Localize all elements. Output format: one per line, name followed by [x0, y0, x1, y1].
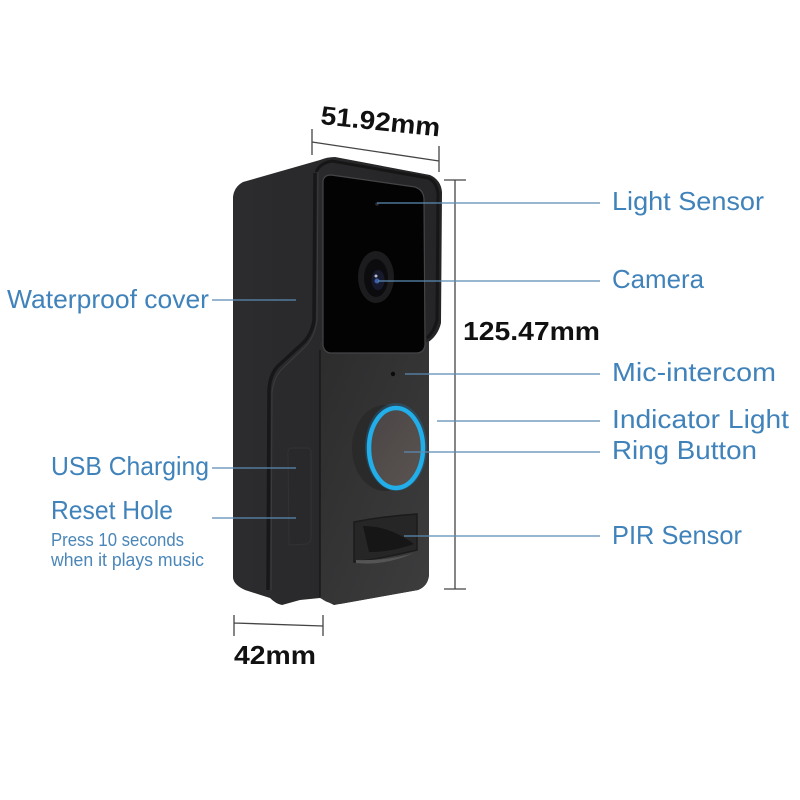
cover rim highlight — [316, 161, 438, 338]
camera lens — [358, 251, 394, 303]
label: PIR Sensor: PIR Sensor — [612, 520, 742, 550]
dimension: height 125.47mm: 125.47mm — [463, 316, 600, 346]
ring button — [352, 403, 427, 491]
label: Indicator Light: Indicator Light — [612, 404, 790, 434]
note: reset instructions: when it plays music — [50, 549, 204, 570]
label: Light Sensor: Light Sensor — [612, 186, 764, 216]
dimension: depth 42mm: 42mm — [234, 640, 316, 670]
dimension: height 125.47mm — [444, 180, 600, 589]
label: Waterproof cover: Waterproof cover — [7, 284, 209, 314]
label: Mic-intercom: Mic-intercom — [612, 357, 776, 387]
note: reset instructions: Press 10 seconds — [51, 529, 184, 550]
light sensor dot — [375, 202, 379, 206]
label: Camera: Camera — [612, 264, 705, 294]
PIR sensor — [354, 514, 417, 564]
glossy black camera panel — [323, 175, 425, 353]
doorbell device — [233, 157, 442, 605]
microphone hole — [391, 372, 395, 376]
dimension: width 51.92mm: 51.92mm — [319, 100, 442, 143]
label: Ring Button: Ring Button — [612, 435, 757, 465]
dimension: width 51.92mm — [312, 100, 442, 172]
doorbell front lower panel — [320, 342, 429, 604]
USB and reset rubber flap — [288, 448, 311, 545]
label: Reset Hole: Reset Hole — [51, 495, 173, 525]
label: USB Charging: USB Charging — [51, 451, 209, 481]
dimension: depth 42mm — [234, 615, 323, 670]
waterproof cover body — [233, 157, 442, 605]
